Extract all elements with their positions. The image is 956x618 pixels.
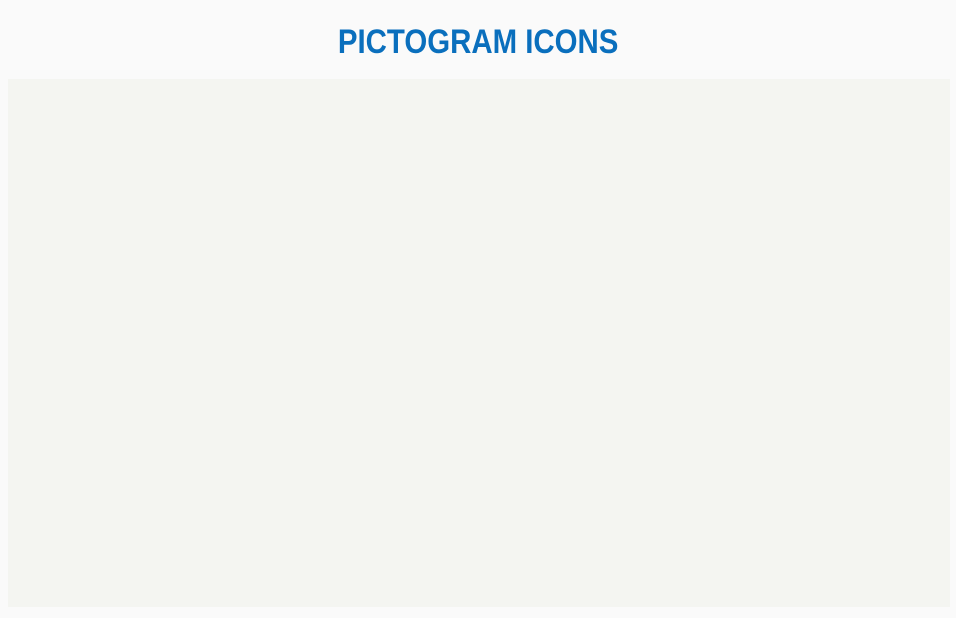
title: PICTOGRAM ICONS <box>338 23 618 61</box>
